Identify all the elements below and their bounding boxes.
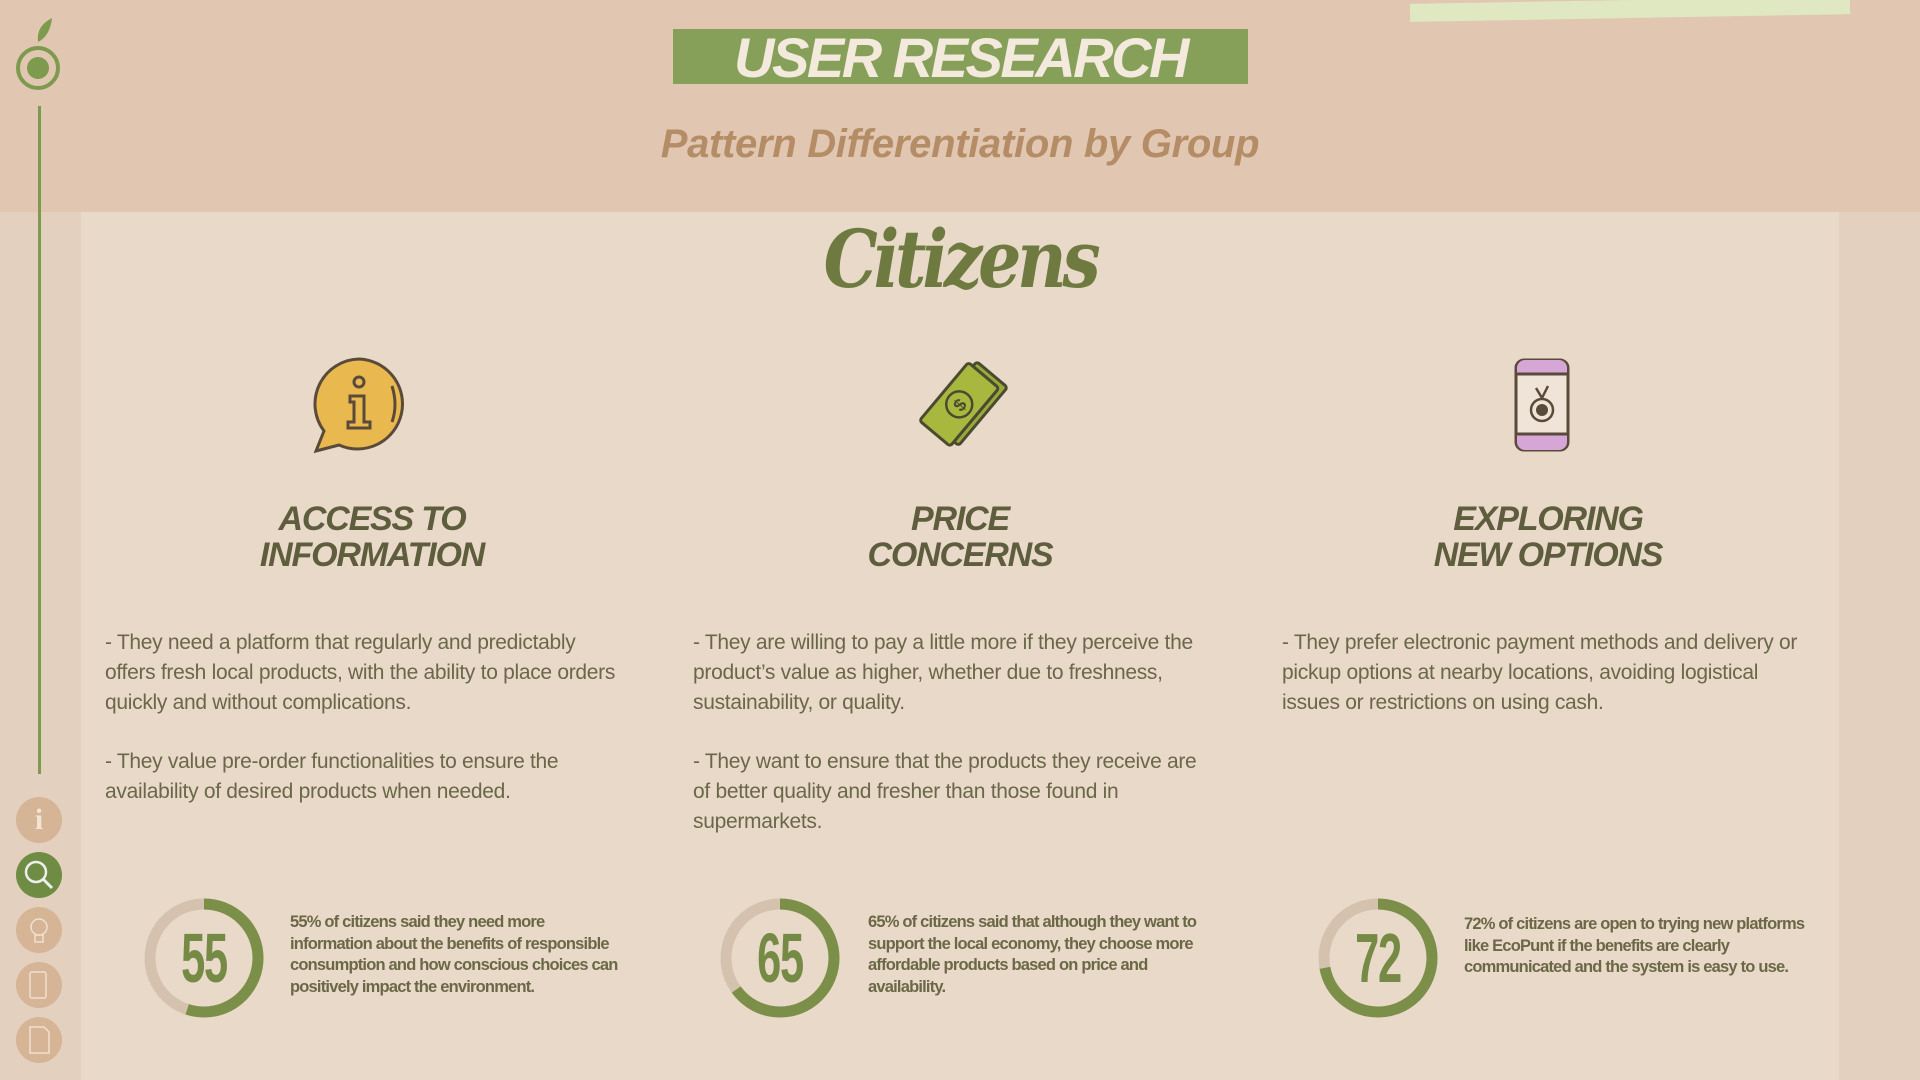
text: access: - They value pre-order functionalities to ensure the availability of desired products when needed. — [105, 750, 558, 803]
subtitle: Pattern Differentiation by Group — [661, 122, 1259, 166]
icon: info bubble — [314, 358, 404, 454]
icon: phone — [1514, 358, 1570, 452]
title: USER RESEARCH — [734, 26, 1187, 89]
group heading: Citizens: Citizens — [824, 212, 1096, 306]
sidebar nav icons: i — [35, 803, 43, 836]
heading: exploring new options: NEW OPTIONS — [1434, 536, 1662, 574]
icon: money — [919, 361, 1008, 447]
text: price — [693, 631, 1196, 833]
heading: access to information — [260, 500, 486, 574]
stat text 72: 72% of citizens are open to trying new platforms like EcoPunt if the benefits are clearly communicated and the system is easy to use. — [1464, 915, 1804, 976]
stat text 65: 65% of citizens said that although they want to support the local economy, they choose more affordable products based on price and availability. — [868, 913, 1196, 996]
sidebar logo — [16, 18, 60, 90]
text: access — [105, 631, 615, 803]
heading: exploring new options: EXPLORING — [1453, 500, 1643, 538]
heading: price concerns: PRICE — [911, 500, 1009, 538]
decoration: green paper top right — [1410, 0, 1850, 22]
donut: 65 — [720, 898, 840, 1018]
donut: 72: 72 — [1355, 919, 1401, 997]
heading: access to information: ACCESS TO — [279, 500, 465, 538]
donut: 55 — [144, 898, 264, 1018]
heading: price concerns: CONCERNS — [868, 536, 1052, 574]
sidebar line — [38, 106, 41, 774]
stat text 55: 55% of citizens said they need more information about the benefits of responsible consumption and how conscious choices can positively impact the environment. — [290, 913, 618, 996]
text: price: - They want to ensure that the products they receive are of better quality and fresher than those found in supermarkets. — [693, 750, 1196, 833]
text: access: - They need a platform that regularly and predictably offers fresh local products, with the ability to place orders quickly and without complications. — [105, 631, 615, 714]
heading: price concerns — [868, 500, 1054, 574]
heading: exploring new options — [1434, 500, 1663, 574]
donut: 65: 65 — [757, 919, 803, 997]
text: price: - They are willing to pay a little more if they perceive the product’s value as higher, whether due to freshness, sustainability, or quality. — [693, 631, 1193, 714]
heading: access to information: INFORMATION — [260, 536, 484, 574]
donut: 72 — [1318, 898, 1438, 1018]
icon: money: $ — [949, 395, 971, 415]
text: exploring: - They prefer electronic payment methods and delivery or pickup options at nearby locations, avoiding logistical issues or restrictions on using cash. — [1282, 631, 1797, 714]
sidebar nav icons — [16, 797, 62, 1063]
donut: 55: 55 — [181, 919, 227, 997]
